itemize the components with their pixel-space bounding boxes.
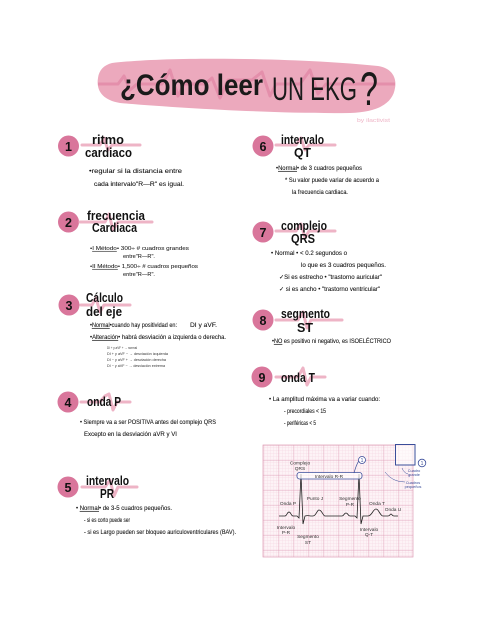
body text <box>89 169 184 188</box>
body text <box>271 251 386 293</box>
heading: Cardiaca <box>92 220 138 235</box>
ecg labels: Complejo <box>290 460 310 466</box>
author credit: by ilactivist <box>357 118 391 124</box>
body text: entre"R—R". <box>123 272 155 278</box>
body text: DI y aVF. <box>190 323 217 329</box>
heading: ritmo <box>92 132 124 147</box>
body text: •Normal• de 3 cuadros pequeños <box>276 166 362 172</box>
big square callout: Cuadros <box>406 481 420 485</box>
ecg labels: Onda T <box>369 501 385 507</box>
ecg labels: Intervalo R-R <box>315 474 344 480</box>
body text: •regular si la distancia entre <box>89 169 183 175</box>
section 7: complejo QRS <box>252 218 386 293</box>
big square callout: Cuadro <box>408 469 420 473</box>
heading: ST <box>297 320 313 335</box>
wave <box>81 298 130 312</box>
section 2: frecuencia cardiaca <box>58 208 198 278</box>
number badge 5 <box>58 476 78 498</box>
heading: Cálculo <box>86 290 123 305</box>
number badge 2: 2 <box>65 216 72 230</box>
section 5: intervalo PR <box>58 473 236 536</box>
section 8: segmento ST <box>252 306 391 345</box>
body text: - si es Largo pueden ser bloqueo auriculoventriculares (BAV). <box>84 530 236 536</box>
section 9: onda T <box>252 366 380 427</box>
heading <box>86 473 129 501</box>
wave <box>276 224 335 238</box>
axis list: DI − y aVF + → desviación derecha <box>107 358 166 362</box>
number badge 8: 8 <box>260 314 267 328</box>
wave <box>82 138 140 150</box>
number badge 4 <box>58 392 78 412</box>
heading: intervalo <box>86 473 129 488</box>
wave <box>276 368 325 385</box>
body text <box>90 323 226 341</box>
body text: Excepto en la desviación aVR y VI <box>84 432 177 438</box>
number badge 5: 5 <box>65 481 72 495</box>
number badge 9: 9 <box>259 371 266 385</box>
body text: - precordiales < 15 <box>284 409 327 415</box>
wave <box>80 214 152 230</box>
heading: frecuencia <box>87 208 146 223</box>
body text: la frecuencia cardiaca. <box>292 190 348 196</box>
heading: onda P <box>87 394 121 409</box>
heading <box>87 208 146 235</box>
ecg labels: Onda U <box>385 507 402 513</box>
body text <box>90 246 198 278</box>
title banner: UN EKG <box>272 71 357 107</box>
body text: * Su valor puede variar de acuerdo a <box>285 178 380 184</box>
body text <box>276 166 380 196</box>
ecg labels: Intervalo <box>360 527 379 533</box>
ecg labels: Segmento <box>339 496 361 502</box>
big square callout: grande <box>408 473 420 477</box>
body text: lo que es 3 cuadros pequeños. <box>301 263 386 269</box>
body text: •II Método • 1,500÷ # cuadros pequeños <box>90 264 198 270</box>
body text <box>269 397 380 427</box>
number badge 1: 1 <box>65 140 72 154</box>
R-R interval box <box>297 472 362 479</box>
ecg labels: P-R <box>346 502 355 508</box>
title banner <box>98 59 395 115</box>
number badge 6: 6 <box>260 140 267 154</box>
ecg labels: Onda P <box>280 501 296 507</box>
body text: • Siempre va a ser POSITIVA antes del complejo QRS <box>80 420 216 426</box>
body text: • La amplitud máxima va a variar cuando: <box>269 397 380 403</box>
ECG diagram <box>263 444 426 557</box>
ecg labels: Intervalo <box>277 525 296 531</box>
body text: •NO es positivo ni negativo, es ISOELÉCTRICO <box>272 338 391 345</box>
ecg labels: Segmento <box>297 534 319 540</box>
heading <box>85 132 132 160</box>
number badge 2 <box>58 212 79 232</box>
title banner: ? <box>360 62 378 115</box>
heading: del eje <box>86 304 122 319</box>
section 4: onda P <box>58 392 216 438</box>
marker 1 <box>354 456 366 473</box>
ecg labels: Punto J <box>307 496 324 502</box>
body text: - periféricas < 5 <box>284 421 316 427</box>
wave <box>276 312 342 328</box>
body text: cada intervalo"R—R" es igual. <box>94 182 184 188</box>
number badge 4: 4 <box>65 396 72 410</box>
body text: • Normal • < 0.2 segundos o <box>271 251 348 257</box>
heading: segmento <box>281 306 330 321</box>
wave <box>82 480 137 496</box>
ecg labels: QRS <box>295 466 305 472</box>
grid paper <box>263 445 413 557</box>
title text: ¿Cómo leer <box>120 69 263 102</box>
section 6: intervalo QT <box>252 132 380 196</box>
axis list: DI − y aVF − → desviación extrema <box>107 364 165 368</box>
number badge 3: 3 <box>66 299 73 313</box>
ecg labels: Q-T <box>365 532 373 538</box>
wave <box>276 138 335 150</box>
number badge 3 <box>58 294 80 316</box>
big square callout <box>385 444 426 489</box>
heading <box>86 290 123 319</box>
banner background <box>98 59 395 113</box>
heading: complejo <box>281 218 327 233</box>
body text <box>76 506 236 536</box>
heading: intervalo <box>281 132 324 147</box>
body text: entre"R—R". <box>123 254 155 260</box>
number badge 7: 7 <box>260 226 267 240</box>
heading: QT <box>294 145 311 160</box>
section 1: ritmo cardiaco <box>58 132 184 188</box>
body text <box>80 420 216 438</box>
body text: •Alteración• habrá desviación a izquierda o derecha. <box>90 335 226 341</box>
big square callout: pequeños <box>405 485 421 489</box>
body text: - si es corto puede ser <box>84 518 130 524</box>
body text: ✓ si es ancho • "trastorno ventricular" <box>279 287 380 293</box>
body text: •Normal•cuando hay positividad en: <box>90 323 177 329</box>
heading: cardiaco <box>85 145 132 160</box>
big square callout: 1 <box>421 461 424 467</box>
heading: PR <box>100 486 114 501</box>
wave <box>81 394 130 410</box>
marker 1: 1 <box>361 458 364 464</box>
heading: QRS <box>291 231 315 246</box>
body text: • Normal• de 3-5 cuadros pequeños. <box>76 506 172 512</box>
ecg trace <box>279 474 398 524</box>
axis list <box>107 346 168 368</box>
section 3: calculo del eje <box>58 290 226 368</box>
heading <box>281 218 327 246</box>
body text: •I Método • 300÷ # cuadros grandes <box>90 246 189 252</box>
ecg labels <box>277 460 402 546</box>
body text: ✓Si es estrecho • "trastorno auricular" <box>279 275 382 281</box>
ecg labels: P-R <box>282 530 291 536</box>
axis list: DI + y aVF + → normal <box>107 346 137 350</box>
heading <box>281 132 324 160</box>
banner ekg wave <box>98 70 395 98</box>
heading: onda T <box>281 370 315 385</box>
ecg labels: ST <box>305 540 311 546</box>
axis list: DI + y aVF − → desviación izquierda <box>107 352 168 356</box>
heading <box>281 306 330 335</box>
